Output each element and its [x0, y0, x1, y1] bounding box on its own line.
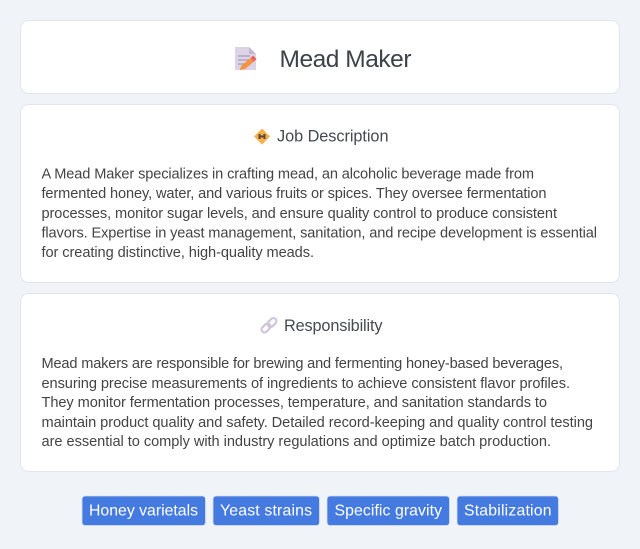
text block: job description body: for creating distinctive, high-quality meads.	[42, 245, 314, 261]
text block: responsibility body: maintain product quality and safety. Detailed record-keeping and quality control testing	[42, 415, 593, 431]
text block: job description body: A Mead Maker specializes in crafting mead, an alcoholic beverage made from	[42, 166, 534, 182]
icon: chain link	[260, 317, 278, 334]
text block: responsibility body	[42, 356, 593, 450]
tag: Stabilization: Stabilization	[464, 502, 552, 520]
tag: Specific gravity: Specific gravity	[334, 502, 442, 520]
heading: Responsibility: Responsibility	[284, 317, 383, 335]
panel: responsibility	[20, 294, 620, 472]
text block: job description body: fermented honey, water, and various fruits or spices. They oversee fermentation	[42, 186, 546, 202]
text block: responsibility body: They monitor fermentation processes, temperature, and sanitation standards to	[42, 395, 547, 411]
text block: job description body	[42, 166, 597, 261]
panel: job description	[20, 104, 620, 282]
tag: Yeast strains: Yeast strains	[220, 502, 312, 520]
heading: Mead Maker: Mead Maker	[280, 46, 412, 73]
tag: Specific gravity	[327, 496, 450, 526]
tags row	[82, 496, 558, 526]
tag: Stabilization	[457, 496, 558, 526]
text block: responsibility body: are essential to comply with industry regulations and optimize batch production.	[42, 434, 551, 450]
text block: job description body: processes, monitor sugar levels, and ensure quality control to produce consistent	[42, 206, 557, 222]
tag: Honey varietals	[82, 496, 206, 526]
tag: Yeast strains	[213, 496, 320, 526]
panel: title card	[20, 20, 620, 94]
text block: job description body: flavors. Expertise in yeast management, sanitation, and recipe development is essential	[42, 226, 597, 242]
icon: document with pencil	[235, 47, 256, 70]
text block: responsibility body: Mead makers are responsible for brewing and fermenting honey-based beverages,	[42, 356, 563, 372]
text block: responsibility body: ensuring precise measurements of ingredients to achieve consistent flavor profiles.	[42, 376, 570, 392]
heading: Job Description: Job Description	[277, 128, 388, 146]
icon: honey diamond	[254, 128, 270, 144]
tag: Honey varietals: Honey varietals	[89, 502, 198, 520]
